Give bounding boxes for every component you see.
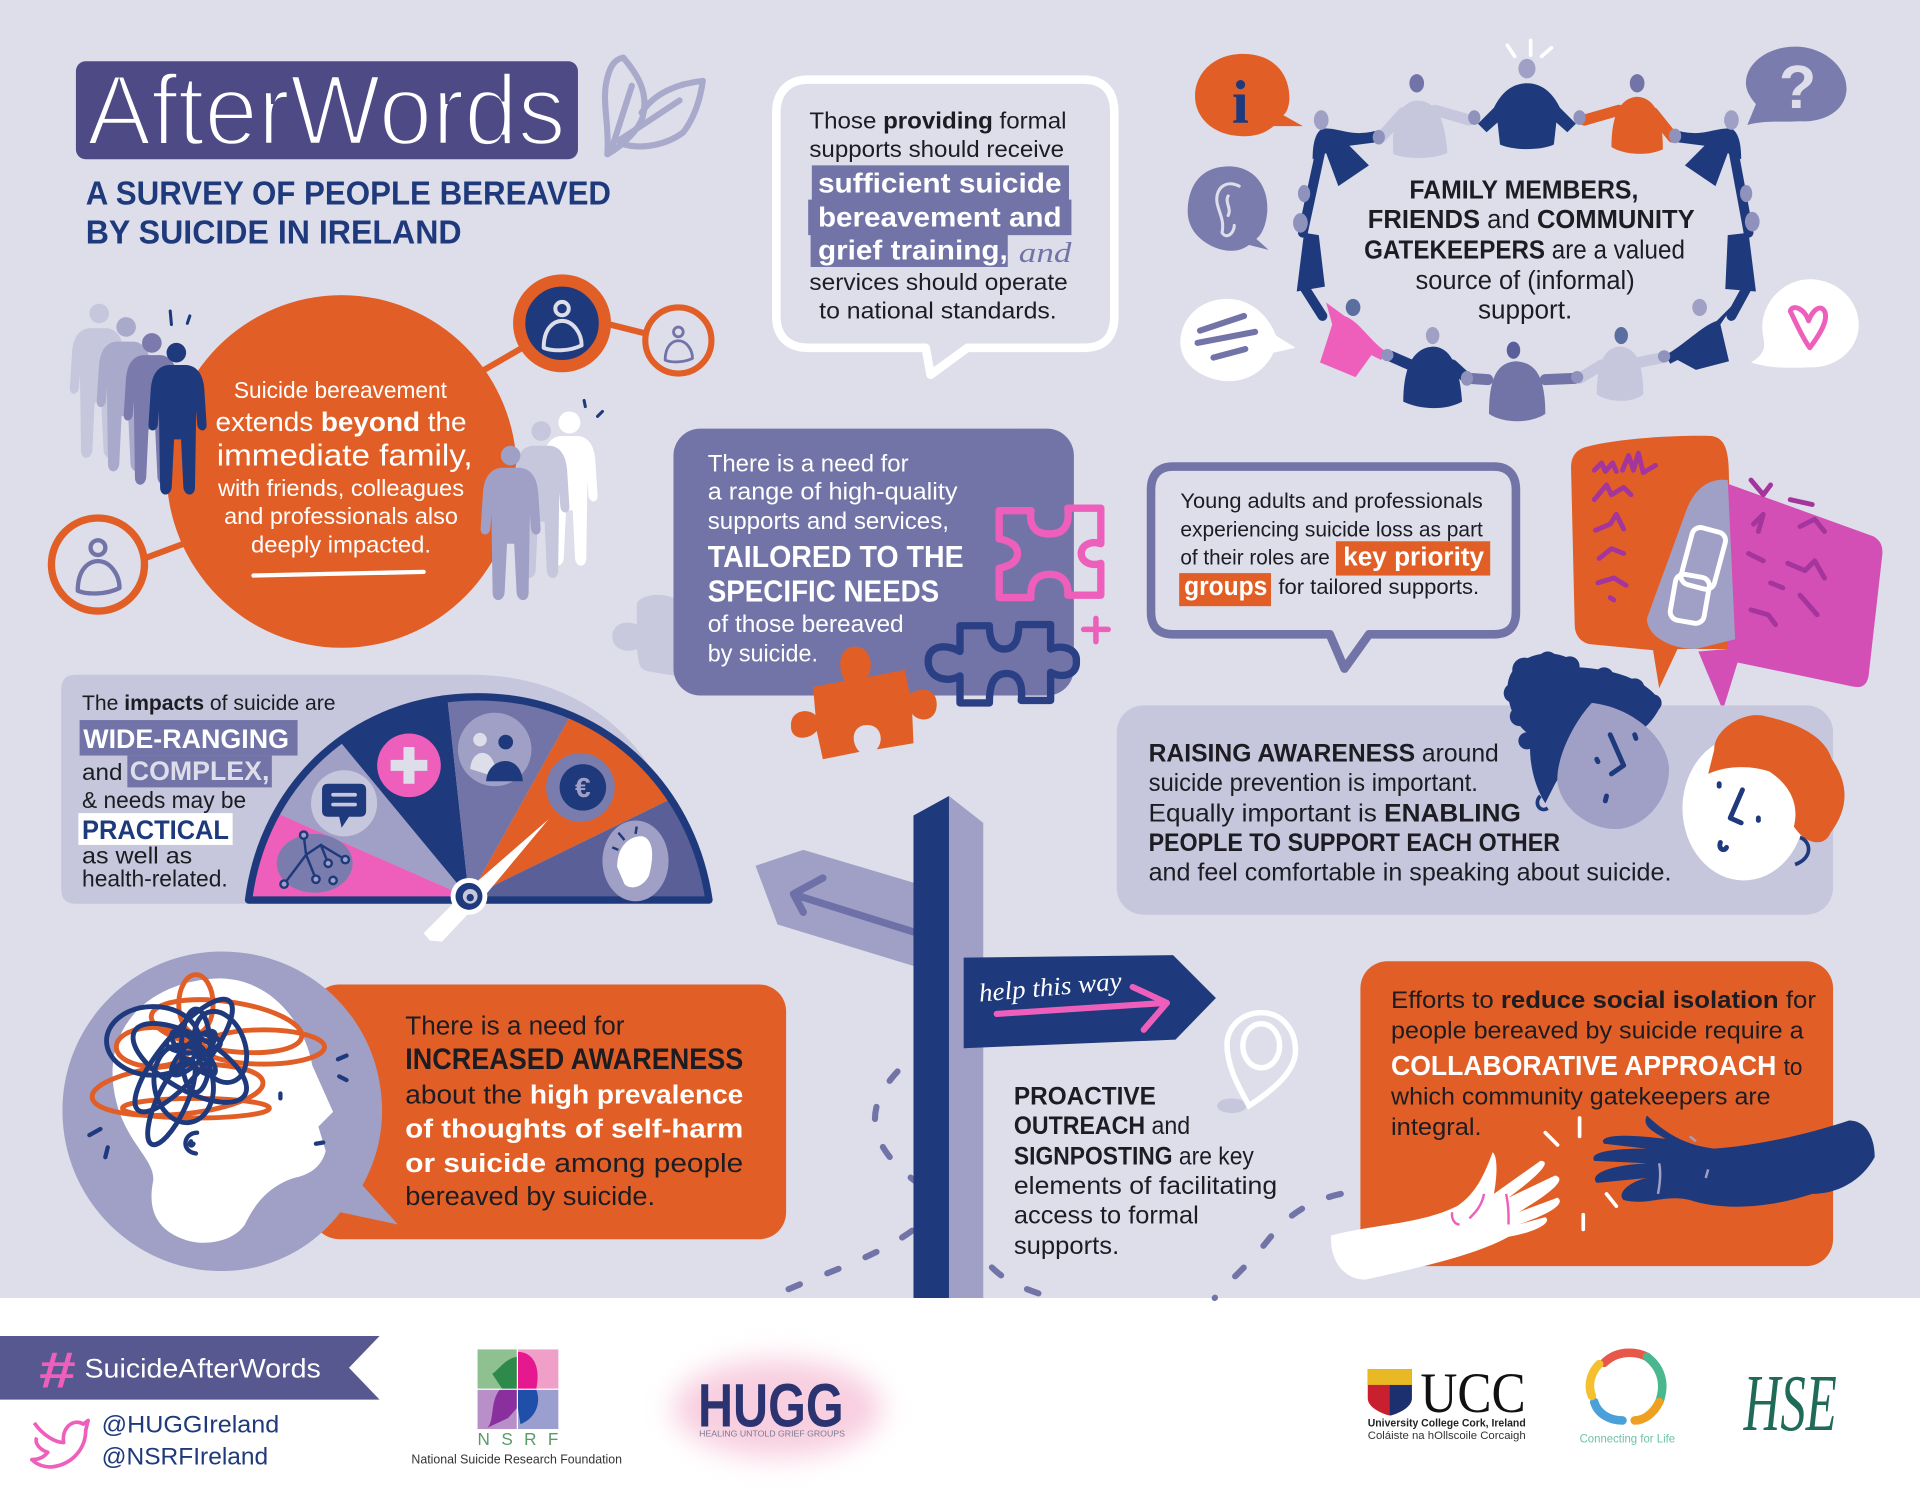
ring text: source of (informal) [1416,267,1635,295]
subtitle [86,176,611,252]
logo: UCC [1368,1362,1526,1442]
subtitle: A SURVEY OF PEOPLE BEREAVED [86,176,611,213]
icon: map pin [1217,1013,1296,1113]
logo: NSRF: NSRF [478,1429,558,1449]
outreach text: PROACTIVE [1014,1083,1156,1111]
footer background [0,1298,1920,1510]
side arms [1303,153,1749,316]
bubble text: Those providing formal [809,108,1067,134]
pink arrow [997,987,1167,1030]
dashed trail [769,1071,1341,1300]
panel text: or suicide among people [405,1148,743,1178]
panel text: PEOPLE TO SUPPORT EACH OTHER [1149,829,1560,857]
handles [102,1412,279,1471]
hashtag banner [0,1336,380,1400]
icon: head [602,820,669,901]
gauge text: and [82,759,122,785]
outreach text: elements of facilitating [1014,1172,1277,1200]
panel: formal supports speech bubble [776,80,1114,375]
gauge text: WIDE-RANGING [83,724,289,754]
handles: @NSRFIreland [102,1444,268,1471]
orange circle [167,295,517,648]
icon: people [458,713,531,786]
panel text: SPECIFIC NEEDS [708,574,939,608]
icon: navy hand [1593,1116,1875,1207]
ring text: FRIENDS and COMMUNITY [1368,206,1695,234]
hash symbol: # [39,1340,76,1398]
underline stroke [253,572,424,576]
icon: white hand [1331,1152,1560,1280]
title box [76,61,578,159]
icon: navy puzzle piece [928,625,1076,703]
icon: bird [32,1420,88,1467]
circle text: deeply impacted. [251,531,431,557]
circle text [216,377,473,557]
panel text: COLLABORATIVE APPROACH to [1391,1050,1802,1081]
gauge text: & needs may be [82,787,246,813]
logo: HUGG: HUGG [698,1372,844,1440]
subtitle: BY SUICIDE IN IRELAND [86,215,462,252]
squiggle lines [1594,453,1824,625]
right sign [964,955,1216,1048]
panel: impacts gauge [61,674,713,942]
link panel [1647,480,1735,649]
panel text: by suicide. [708,640,818,667]
panel text: integral. [1391,1114,1482,1141]
orange panel [312,985,786,1239]
icon: euro coin [546,753,615,822]
icon: person circle left [51,518,144,611]
icon: leaves [605,58,703,154]
icon: euro coin: € [575,772,591,803]
title block [76,55,703,252]
gauge text: The impacts of suicide are [82,691,336,715]
circle text: immediate family, [217,438,473,472]
panel text [708,450,964,667]
highlights [1179,541,1490,606]
gauge text: health-related. [82,866,228,892]
panel text: There is a need for [405,1011,625,1041]
bubble text: for tailored supports. [1278,575,1479,599]
panel text: of thoughts of self-harm [405,1114,743,1144]
sign text: help this way [978,966,1123,1008]
logo: NSRF: National Suicide Research Foundation [411,1451,622,1466]
panel text: about the high prevalence [405,1079,743,1109]
highlights [808,165,1071,267]
gauge text: as well as [82,842,192,868]
head silhouette [113,978,333,1243]
logo: UCC: University College Cork, Ireland [1368,1418,1526,1430]
outreach text: SIGNPOSTING are key [1014,1143,1254,1171]
outreach text: access to formal [1014,1201,1199,1229]
icon: orange puzzle piece [791,647,937,759]
icon: woman face [1504,651,1669,829]
gauge text [82,691,336,892]
logo: HUGG [673,1359,882,1457]
icon: question bubble [1746,47,1847,125]
left sign arrow [793,878,913,932]
side shirts [1297,233,1756,291]
panel text: a range of high-quality [708,479,958,506]
orange bubble [1571,436,1733,688]
panel text: supports and services, [708,508,949,535]
logo: Connecting for Life: Connecting for Life [1580,1431,1675,1445]
orange panel [1360,961,1833,1266]
bubble text: supports should receive [809,136,1064,162]
icon: small person circle right [645,307,711,374]
panel text: There is a need for [708,450,909,477]
highlights [78,720,298,845]
bubble outline [776,80,1114,375]
ring text: GATEKEEPERS are a valued [1364,236,1685,264]
logo: UCC: UCC [1420,1362,1526,1425]
panel: raising awareness [1117,651,1845,915]
hashtag text: SuicideAfterWords [84,1354,321,1384]
bubble text: grief training, [818,235,1008,266]
panel text: INCREASED AWARENESS [405,1043,743,1076]
icon: heart bubble [1751,279,1859,368]
pink bubble [1698,484,1882,710]
bubble text: and [1019,238,1073,269]
icon: medical cross [377,734,441,797]
title text: AfterWords [87,55,566,167]
panel text [405,1011,743,1211]
panel text: Equally important is ENABLING [1149,800,1521,828]
panel text: TAILORED TO THE [708,540,964,574]
panel text: of those bereaved [708,611,904,638]
face details [89,1056,347,1157]
logo: NSRF [411,1349,622,1466]
gauge hub [451,878,487,915]
panel: bereavement circle [51,280,711,648]
signpost [756,796,1341,1300]
ring text [1364,176,1695,324]
connecting arms [1381,110,1673,380]
bubble text: services should operate [809,269,1068,295]
people [1313,59,1741,421]
panel text: people bereaved by suicide require a [1391,1017,1804,1044]
figures right [481,400,602,600]
bubble text [1180,489,1485,601]
icon: network [277,831,353,893]
outreach text [1014,1083,1277,1260]
bubble text: experiencing suicide loss as part [1180,517,1483,541]
outreach text: supports. [1014,1232,1119,1260]
panel: young adults speech bubble [1151,467,1516,669]
bubble text: groups [1184,573,1267,601]
panel text: Efforts to reduce social isolation for [1391,987,1816,1014]
logo: Connecting for Life [1580,1353,1675,1445]
left sign [756,850,918,967]
logo: HUGG: HEALING UNTOLD GRIEF GROUPS [699,1429,845,1438]
icon: ear bubble [1188,166,1269,251]
gauge sectors [252,700,705,896]
panel text: which community gatekeepers are [1390,1084,1771,1111]
icon: linked speech bubbles [1571,436,1882,710]
icon: man face [1682,715,1845,880]
logo: UCC: Coláiste na hOllscoile Corcaigh [1368,1430,1526,1442]
bubble text: sufficient suicide [818,167,1062,198]
grey panel [1117,705,1833,915]
gauge outline [249,697,709,900]
icon: question bubble: ? [1779,53,1816,121]
purple panel [673,429,1074,696]
panel: circle of people [1180,40,1859,421]
post [913,796,983,1298]
gauge text: PRACTICAL [82,815,229,845]
logo: HSE: HSE [1743,1359,1837,1448]
scribble [90,975,324,1150]
circle text: Suicide bereavement [234,377,448,403]
panel: tailored supports [612,429,1108,759]
purple speech bubble [62,951,398,1271]
icon: chat bubble [311,770,377,836]
sparks [1545,1118,1616,1229]
icon: info bubble [1195,54,1303,136]
panel text: and feel comfortable in speaking about suicide. [1149,858,1671,886]
footer: social [0,1336,380,1471]
bubble text: key priority [1343,544,1485,572]
icon: pink puzzle piece [999,508,1101,598]
bubble text: of their roles are [1180,546,1330,570]
connector lines [144,325,649,558]
icon: navy person circle [519,280,605,366]
icon: text lines bubble [1180,299,1296,381]
panel: proactive outreach [1014,1013,1296,1260]
panel: increased awareness [62,951,786,1271]
figures left [70,304,207,495]
icon: pink plus [1084,618,1108,642]
panel text [1149,740,1671,886]
panel text: bereaved by suicide. [405,1181,655,1211]
outreach text: OUTREACH and [1014,1112,1190,1140]
panel text [1390,987,1816,1141]
icon: info bubble: i [1232,68,1249,136]
bubble text: to national standards. [819,297,1057,323]
panel: collaborative approach [1331,961,1875,1280]
circle text: and professionals also [224,503,458,529]
panel text: RAISING AWARENESS around [1149,740,1499,768]
circle text: extends beyond the [216,407,467,437]
panel text: suicide prevention is important. [1149,769,1478,797]
ring text: FAMILY MEMBERS, [1409,176,1638,204]
gauge text: COMPLEX, [130,756,269,786]
ring text: support. [1478,296,1572,324]
bubble text: bereavement and [818,202,1062,233]
bubble text: Young adults and professionals [1180,489,1483,513]
chain links [1669,526,1727,625]
circle text: with friends, colleagues [217,475,464,501]
bubble text [809,108,1073,323]
grey panel [61,675,649,904]
sparks [1507,40,1551,56]
hands [1293,110,1760,386]
bubble outline [1151,467,1516,669]
handles: @HUGGIreland [102,1412,279,1439]
needle [424,819,549,942]
ghost puzzle piece [612,595,676,676]
